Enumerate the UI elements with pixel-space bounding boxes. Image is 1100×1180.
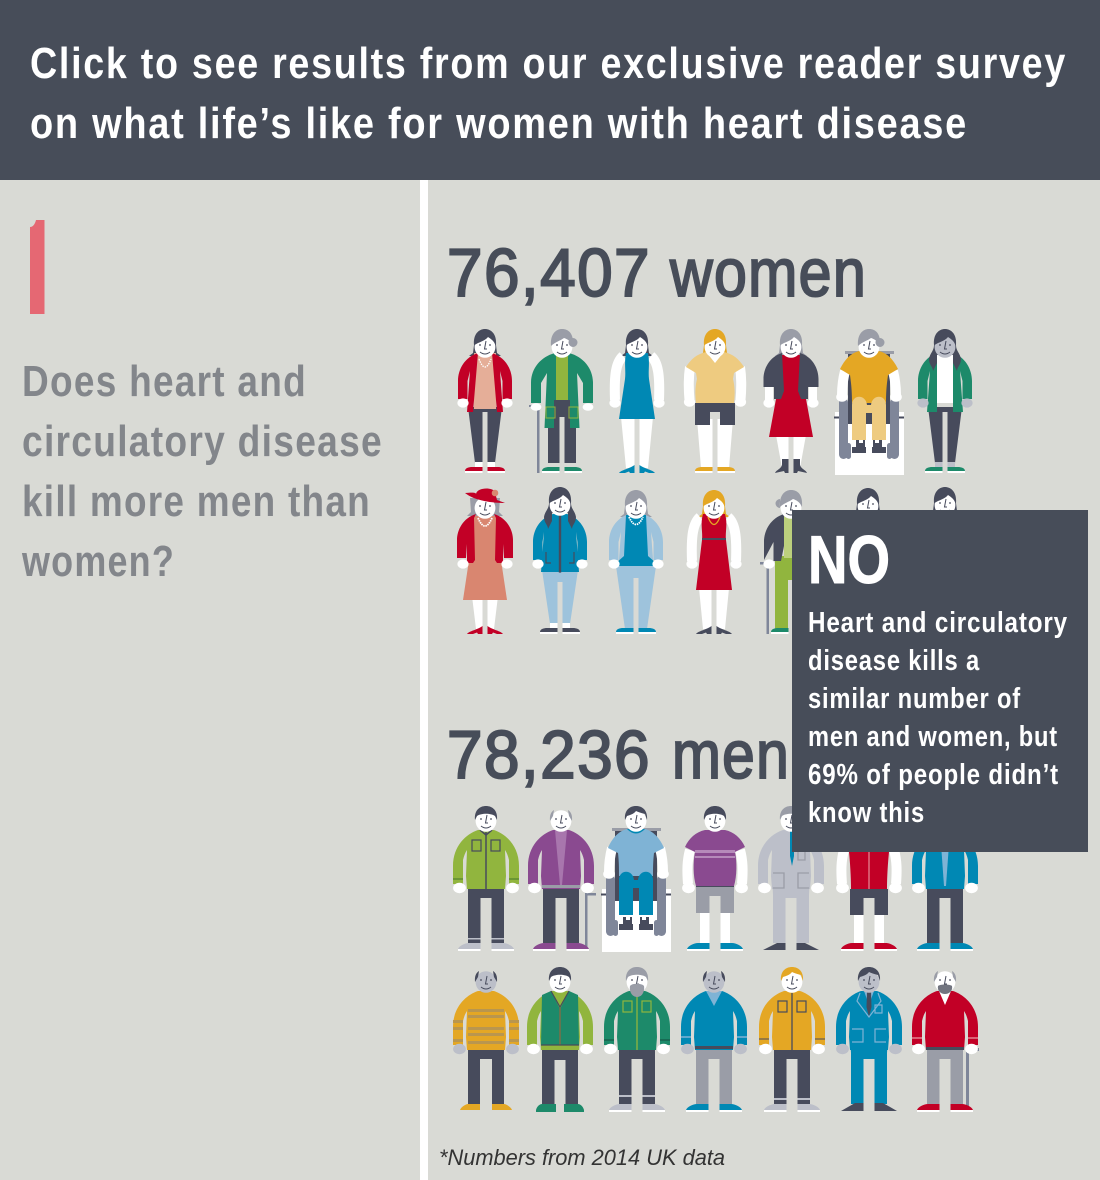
heading: 76,407 women: 76,407 — [447, 235, 651, 311]
man 10: green shirt, grey beard — [604, 967, 670, 1112]
man 2: purple jacket with cane — [528, 810, 596, 951]
header banner: on what life’s like for women with heart disease — [30, 99, 968, 148]
callout body text: similar number of — [808, 683, 1021, 715]
woman 8: red hat, salmon dress — [457, 488, 513, 634]
woman 4: sand top and shorts — [684, 329, 746, 473]
question text: women? — [21, 537, 175, 586]
panel number 1 — [30, 220, 44, 314]
man 5: grey suit — [758, 806, 824, 950]
man 14: red cardigan with cane, beard — [912, 971, 979, 1112]
woman 3: blue dress — [609, 329, 665, 473]
question text: circulatory disease — [22, 417, 383, 466]
men figures row 2 — [453, 967, 979, 1112]
woman 11: red sleeveless dress — [686, 490, 742, 634]
women figures row 2 — [457, 487, 961, 634]
woman 5: red dress, navy jacket — [763, 329, 819, 473]
woman 10: pale cardigan, necklace — [608, 490, 664, 634]
question text: Does heart and — [22, 357, 307, 406]
woman 2: green coat with cane — [529, 329, 593, 473]
man 13: blue suit, navy tie — [836, 967, 902, 1111]
man 12: yellow shirt — [759, 967, 825, 1112]
heading: 78,236 men — [447, 717, 790, 793]
man 8: striped jumper — [453, 971, 519, 1110]
woman 13: head above callout — [852, 488, 884, 517]
woman 9: blue jacket, pale trousers — [532, 487, 588, 634]
woman 14: head above callout — [929, 487, 961, 516]
heading: 76,407 women — [447, 235, 867, 311]
header banner — [0, 0, 1100, 180]
man 4: striped tee and shorts — [682, 806, 748, 951]
callout body text — [808, 607, 1068, 829]
man 7: blue jacket — [912, 806, 978, 951]
heading: 78,236 men: men — [672, 717, 790, 793]
footnote: *Numbers from 2014 UK data — [439, 1145, 725, 1170]
heading: 76,407 women: women — [669, 235, 867, 311]
man 3: wheelchair user — [601, 806, 671, 952]
man 9: green waistcoat — [527, 967, 593, 1112]
woman 1: red blazer — [457, 329, 513, 473]
question text: kill more men than — [22, 477, 371, 526]
heading: 78,236 men: 78,236 — [447, 717, 651, 793]
woman 7: green jacket — [917, 329, 973, 473]
callout body text: know this — [808, 797, 925, 829]
man 6: red shirt and shorts — [836, 806, 902, 951]
woman 6: wheelchair user — [834, 329, 904, 475]
man 1: lime shirt — [453, 806, 519, 951]
women figures row 1 — [457, 329, 973, 475]
man 11: blue jumper, grey trousers — [681, 971, 747, 1112]
woman 12: navy jacket, lime trousers, cane — [760, 490, 819, 634]
men figures row 1 — [453, 806, 978, 952]
callout: answer — [792, 510, 1088, 852]
callout heading: NO — [808, 522, 890, 598]
question text — [21, 357, 383, 586]
callout body text: disease kills a — [808, 645, 980, 677]
